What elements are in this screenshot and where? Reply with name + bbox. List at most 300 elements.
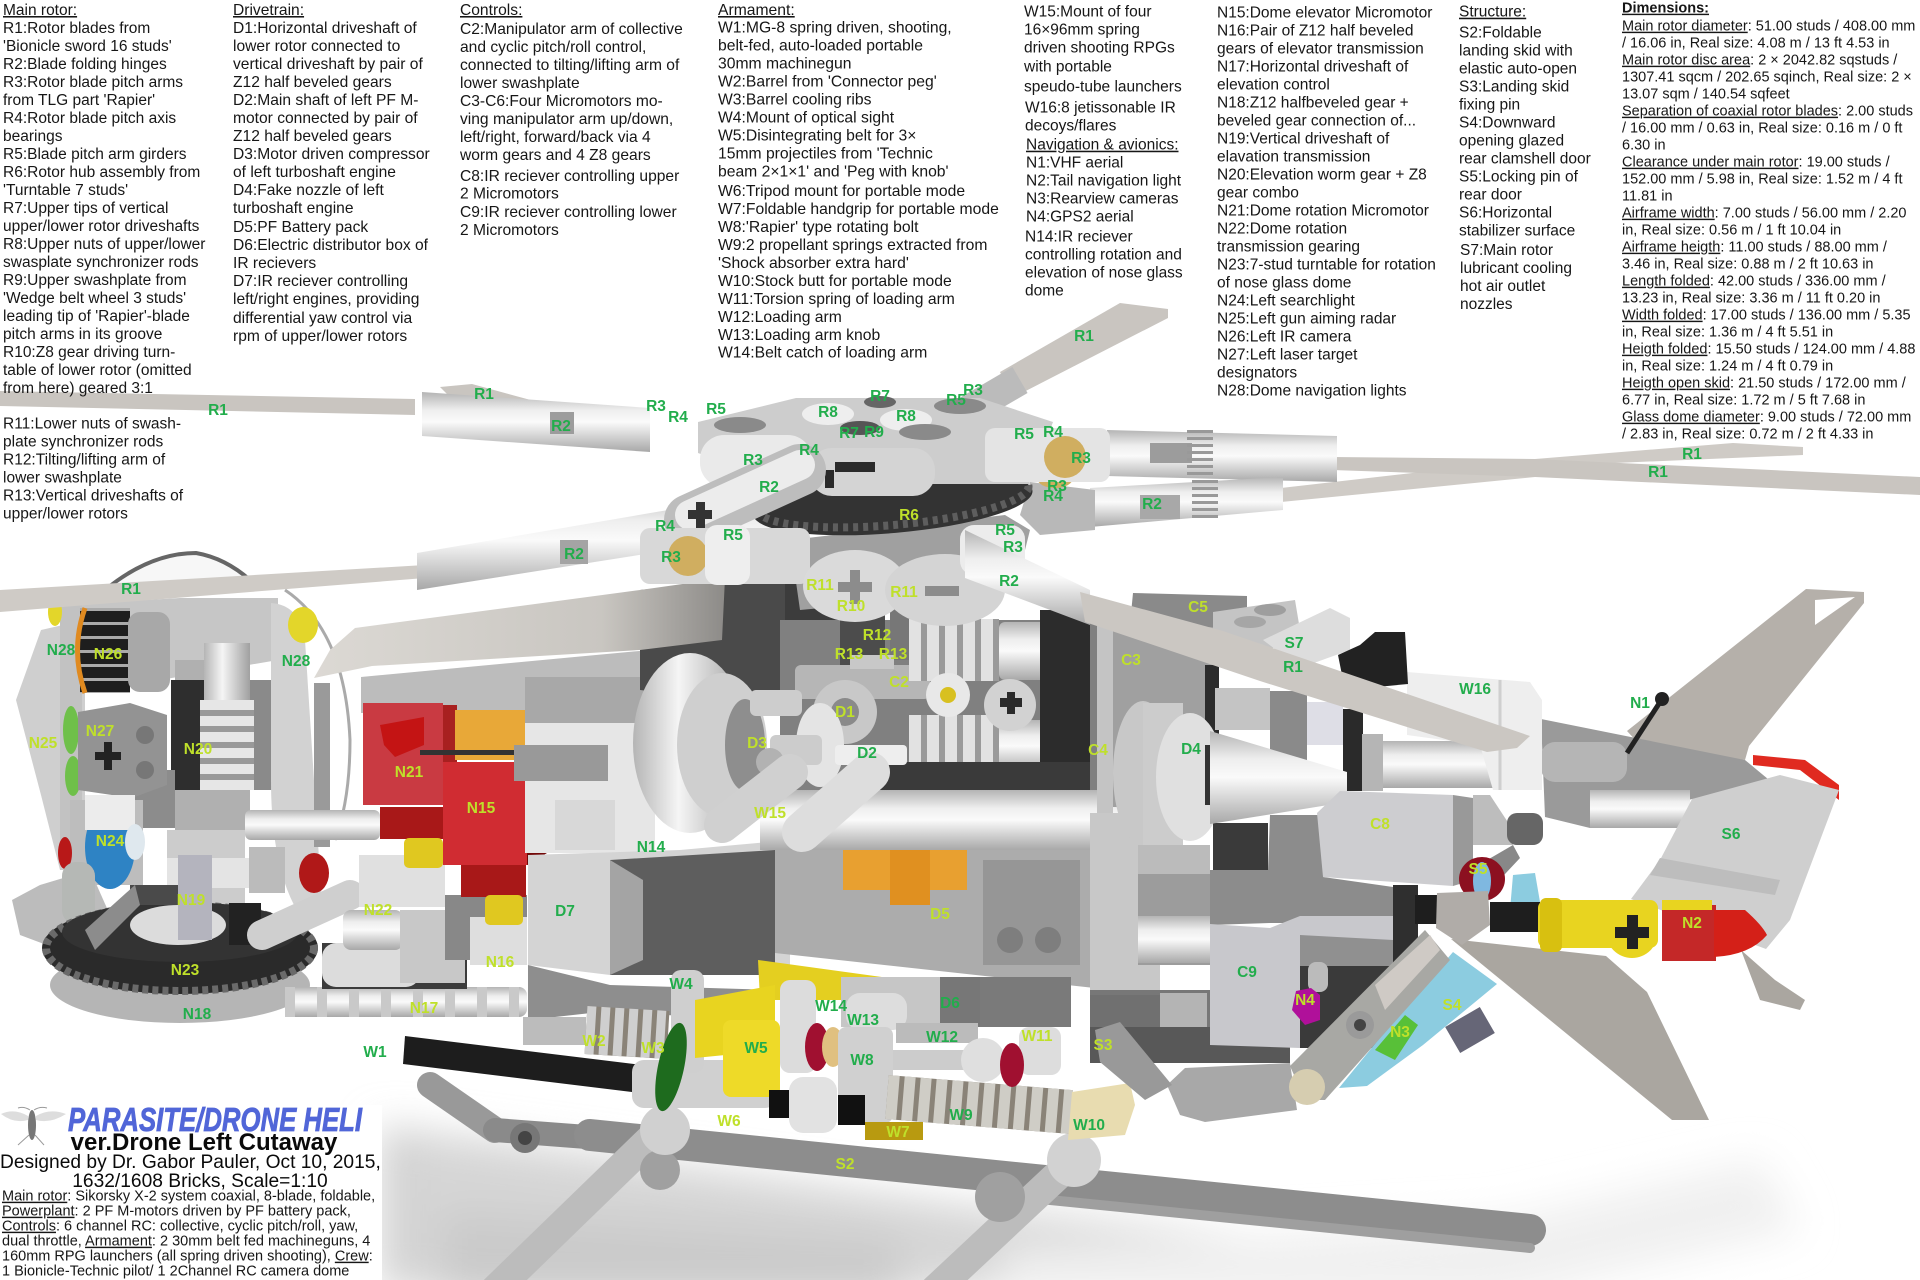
column text: dimensions: Heigth open skid xyxy=(1622,376,1730,392)
column text: drivetrain: D7:IR reciever controlling xyxy=(233,273,408,290)
column text: dimensions: / 16.06 in, Real size: 4.08 m / 13 ft 4.53 in xyxy=(1622,36,1890,52)
column text: drivetrain: IR recievers xyxy=(233,255,316,272)
column text: structure: lubricant cooling xyxy=(1460,260,1572,277)
part labels: rotor: R2 xyxy=(759,479,779,496)
column text: main rotor: R7:Upper tips of vertical xyxy=(3,200,168,217)
roof fairing xyxy=(314,573,845,700)
column text: controls: Controls: xyxy=(460,2,522,19)
part labels: navigation: N19 xyxy=(177,892,206,909)
part labels: armament: W3 xyxy=(641,1040,665,1057)
column text: navigation continued: beveled gear connection of... xyxy=(1217,112,1416,130)
part labels: navigation: N23 xyxy=(171,962,200,979)
column text: main rotor continued: upper/lower rotors xyxy=(3,506,128,522)
column text: armament continued and navigation: elevation of nose glass xyxy=(1025,265,1183,282)
rotor blade over nose xyxy=(0,490,785,612)
column text: controls: C8:IR reciever controlling upper xyxy=(460,168,679,185)
text: credits: 1632/1608 Bricks, Scale=1:10 xyxy=(72,1171,328,1192)
column text: dimensions: : 7.00 studs / 56.00 mm / 2.20 xyxy=(1715,206,1906,222)
part labels: navigation: N20 xyxy=(184,741,212,758)
part labels: rotor: R1 xyxy=(474,386,494,403)
column text: drivetrain: motor connected by pair of xyxy=(233,110,418,127)
part labels: rotor: R5 xyxy=(1014,426,1034,443)
column text: main rotor: R2:Blade folding hinges xyxy=(3,56,167,73)
column text: navigation continued: N24:Left searchlight xyxy=(1217,292,1356,310)
column text: armament: belt-fed, auto-loaded portable xyxy=(718,38,923,54)
column text: drivetrain: differential yaw control via xyxy=(233,310,412,327)
column text: main rotor: pitch arms in its groove xyxy=(3,326,162,343)
part labels: rotor: R8 xyxy=(896,408,916,425)
part labels: armament xyxy=(363,681,1491,1141)
column text: armament continued and navigation: speudo-tube launchers xyxy=(1024,79,1182,96)
column text: main rotor continued: R11:Lower nuts of swash- xyxy=(3,416,181,432)
part labels: rotor: R5 xyxy=(723,527,743,544)
column text: structure: S2:Foldable xyxy=(1459,25,1542,42)
part labels: armament: W14 xyxy=(815,998,847,1015)
heading: project name: PARASITE/DRONE HELI xyxy=(68,1101,363,1138)
part labels: structure: S7 xyxy=(1285,635,1303,652)
column text: dimensions: : 19.00 studs / xyxy=(1799,155,1891,171)
part labels: rotor: R2 xyxy=(551,418,571,435)
column text: main rotor continued: lower swashplate xyxy=(3,470,122,486)
column text: main rotor: upper/lower rotor driveshafts xyxy=(3,218,200,235)
column text: main rotor: 'Wedge belt wheel 3 studs' xyxy=(3,290,186,307)
machine gun assembly xyxy=(403,960,1172,1140)
lower fuselage C9 block xyxy=(1090,813,1418,1122)
text: summary: Crew: xyxy=(335,1249,373,1265)
red micromotors N21 and N15 xyxy=(361,650,650,925)
column text: navigation continued: N18:Z12 halfbeveled gear + xyxy=(1217,94,1409,112)
icon: parasite wasp xyxy=(1,1107,66,1145)
part labels: armament: W7 xyxy=(886,1124,910,1141)
part labels: controls and drivetrain: C8 xyxy=(1370,816,1390,833)
part labels: navigation: N3 xyxy=(1390,1024,1410,1041)
part labels: navigation: N15 xyxy=(467,800,496,817)
part labels: rotor: R5 xyxy=(706,401,726,418)
column text: main rotor: R6:Rotor hub assembly from xyxy=(3,164,200,181)
part labels: rotor: R1 xyxy=(1283,659,1303,676)
part labels: rotor: R3 xyxy=(661,549,681,566)
part labels: rotor: R3 xyxy=(646,398,666,415)
central transmission and worm gears xyxy=(780,570,1100,810)
column text: dimensions: : 2.00 studs xyxy=(1838,104,1913,120)
column text: controls: and cyclic pitch/roll control, xyxy=(460,39,646,56)
column text: navigation continued: N25:Left gun aiming radar xyxy=(1217,310,1396,328)
column text: armament: W1:MG-8 spring driven, shooting, xyxy=(718,20,952,36)
part labels: rotor: R2 xyxy=(1142,496,1162,513)
column text: main rotor continued: plate synchronizer rods xyxy=(3,434,163,450)
part labels: controls and drivetrain: C2 xyxy=(889,674,909,691)
part labels: armament: W12 xyxy=(926,1029,958,1046)
column text: dimensions: Dimensions: xyxy=(1622,1,1709,17)
part labels: navigation: N18 xyxy=(183,1006,212,1023)
part labels: armament: W13 xyxy=(847,1012,879,1029)
column text: dimensions: : 9.00 studs / 72.00 mm xyxy=(1760,410,1911,426)
column text: main rotor continued: R12:Tilting/lifting arm of xyxy=(3,452,166,468)
column text: drivetrain: lower rotor connected to xyxy=(233,38,401,55)
column text: drivetrain: D4:Fake nozzle of left xyxy=(233,182,384,199)
column text: dimensions: 11.81 in xyxy=(1622,189,1673,205)
text: summary: : 6 channel RC: collective, cyclic pitch/roll, yaw, xyxy=(56,1219,358,1235)
part labels: rotor: R3 xyxy=(963,382,983,399)
column text: dimensions: : 42.00 studs / 336.00 mm / xyxy=(1710,274,1887,290)
part labels: controls and drivetrain: D3 xyxy=(747,735,767,752)
part labels: controls and drivetrain: C9 xyxy=(1237,964,1257,981)
part labels: navigation: N28 xyxy=(282,653,311,670)
column text: dimensions: : 2 × 2042.82 sqstuds / xyxy=(1750,53,1898,69)
part labels: armament: W2 xyxy=(582,1033,606,1050)
column text: main rotor: R10:Z8 gear driving turn- xyxy=(3,344,175,361)
part labels: structure: S6 xyxy=(1722,826,1741,843)
part labels: rotor: R4 xyxy=(1043,424,1063,441)
column text: drivetrain: D6:Electric distributor box of xyxy=(233,237,429,254)
column text: dimensions: : 17.00 studs / 136.00 mm / 5.35 xyxy=(1703,308,1911,324)
title panel xyxy=(0,1101,382,1280)
part labels: controls and drivetrain: D5 xyxy=(930,906,950,923)
column text: structure: landing skid with xyxy=(1459,43,1573,60)
part labels: rotor: R1 xyxy=(208,402,228,419)
text: summary: : Sikorsky X-2 system coaxial, 8-blade, foldable, xyxy=(67,1189,375,1205)
part labels: rotor: R7 xyxy=(839,425,859,442)
column text: armament: 'Shock absorber extra hard' xyxy=(718,255,909,272)
column text: drivetrain: of left turboshaft engine xyxy=(233,164,396,181)
rear top deck C5 and nozzles S7 xyxy=(1130,593,1350,668)
part labels: navigation: N16 xyxy=(486,954,515,971)
column text: controls: connected to tilting/lifting arm of xyxy=(460,57,680,74)
part labels: rotor: R4 xyxy=(799,442,819,459)
part labels: navigation: N4 xyxy=(1295,992,1315,1009)
part labels: structure: S4 xyxy=(1443,997,1462,1014)
column text: navigation continued: N16:Pair of Z12 half beveled xyxy=(1217,22,1413,40)
column text: dimensions: in, Real size: 0.56 m / 1 ft 10.04 in xyxy=(1622,223,1841,239)
text: summary: : 2 PF M-motors driven by PF battery pack, xyxy=(75,1204,351,1220)
part labels: controls and drivetrain: D6 xyxy=(940,995,960,1012)
part labels: rotor: R3 xyxy=(743,452,763,469)
nose assembly xyxy=(12,598,380,1023)
column text: drivetrain: left/right engines, providing xyxy=(233,291,419,308)
part labels: rotor: R7 xyxy=(870,388,890,405)
part labels: rotor: R4 xyxy=(1043,488,1063,505)
column text: armament: W2:Barrel from 'Connector peg' xyxy=(718,74,937,90)
column text: armament: W10:Stock butt for portable mode xyxy=(718,273,952,290)
column text: controls: lower swashplate xyxy=(460,75,580,92)
column text: navigation continued: N17:Horizontal driveshaft of xyxy=(1217,58,1409,76)
part labels: armament: W5 xyxy=(744,1040,768,1057)
column text: dimensions: / 16.00 mm / 0.63 in, Real size: 0.16 m / 0 ft xyxy=(1622,121,1902,137)
column text: dimensions: Glass dome diameter xyxy=(1622,410,1760,426)
column text: structure: stabilizer surface xyxy=(1459,223,1575,240)
column text: main rotor: Main rotor: xyxy=(3,2,77,19)
column text: armament: W12:Loading arm xyxy=(718,309,842,326)
part labels: navigation: N28 xyxy=(47,642,76,659)
column text: navigation continued: N27:Left laser target xyxy=(1217,346,1358,364)
column text: main rotor: R5:Blade pitch arm girders xyxy=(3,146,187,163)
column text: armament continued and navigation: driven shooting RPGs xyxy=(1024,40,1175,57)
column text: armament continued and navigation: W15:Mount of four xyxy=(1024,4,1152,21)
column text: dimensions: Clearance under main rotor xyxy=(1622,155,1799,171)
part labels: structure: S2 xyxy=(836,1156,854,1173)
text: credits: Designed by Dr. Gabor Pauler, Oct 10, 2015, xyxy=(0,1152,381,1173)
column text: dimensions: 13.23 in, Real size: 3.36 m / 11 ft 0.20 in xyxy=(1622,291,1880,307)
column text: armament continued and navigation: N1:VHF aerial xyxy=(1026,155,1123,172)
column text: main rotor continued: R13:Vertical driveshafts of xyxy=(3,488,184,504)
column text: main rotor: R4:Rotor blade pitch axis xyxy=(3,110,176,127)
column text: armament: W14:Belt catch of loading arm xyxy=(718,344,927,362)
column text: armament: 15mm projectiles from 'Technic xyxy=(718,146,933,162)
column text: armament continued and navigation: Navigation & avionics: xyxy=(1026,137,1178,154)
column text: main rotor: R1:Rotor blades from xyxy=(3,20,150,37)
column text: dimensions: 3.46 in, Real size: 0.88 m / 2 ft 10.63 in xyxy=(1622,257,1873,273)
column text: armament: W8:'Rapier' type rotating bolt xyxy=(718,219,919,236)
column text: armament continued and navigation: dome xyxy=(1025,283,1064,300)
column text: navigation continued: transmission gearing xyxy=(1217,238,1360,256)
column text: structure: fixing pin xyxy=(1459,97,1520,114)
column text: dimensions: 152.00 mm / 5.98 in, Real size: 1.52 m / 4 ft xyxy=(1622,172,1902,188)
column text: controls: ving manipulator arm up/down, xyxy=(460,111,673,128)
electronics block C8 xyxy=(1317,791,1543,890)
column text: drivetrain: turboshaft engine xyxy=(233,200,354,217)
column text: dimensions: Width folded xyxy=(1622,308,1703,324)
part labels: navigation: N2 xyxy=(1682,915,1702,932)
column text: drivetrain: Z12 half beveled gears xyxy=(233,74,392,91)
column text: structure: rear door xyxy=(1459,187,1522,204)
rotor blade tubes xyxy=(422,380,1337,527)
part labels: rotor: R3 xyxy=(1047,478,1067,495)
column text: structure: hot air outlet xyxy=(1460,278,1546,295)
column text: navigation continued: N22:Dome rotation xyxy=(1217,220,1347,238)
column text: armament continued and navigation: N3:Rearview cameras xyxy=(1026,191,1179,208)
column text: armament: W11:Torsion spring of loading arm xyxy=(718,291,955,308)
column text: armament continued and navigation: controlling rotation and xyxy=(1025,247,1182,264)
column text: dimensions: in, Real size: 1.24 m / 4 ft 0.79 in xyxy=(1622,359,1833,375)
column text: drivetrain: vertical driveshaft by pair of xyxy=(233,56,423,73)
column text: main rotor: 'Turntable 7 studs' xyxy=(3,182,128,199)
part labels: structure: S5 xyxy=(1469,861,1488,878)
column text: controls: C3-C6:Four Micromotors mo- xyxy=(460,93,663,110)
column text: dimensions: / 2.83 in, Real size: 0.72 m / 2 ft 4.33 in xyxy=(1622,427,1873,443)
column text: dimensions: Airframe width xyxy=(1622,206,1715,222)
column text: dimensions: : 21.50 studs / 172.00 mm / xyxy=(1730,376,1907,392)
column text: structure: S7:Main rotor xyxy=(1460,242,1553,259)
column text: dimensions: 1307.41 sqcm / 202.65 sqinch, Real size: 2 × xyxy=(1622,70,1912,86)
column text: dimensions: Length folded xyxy=(1622,274,1710,290)
part labels: armament: W6 xyxy=(717,1113,741,1130)
part labels: rotor: R13 xyxy=(835,646,864,663)
part labels: armament: W8 xyxy=(850,1052,874,1069)
part labels: controls and drivetrain: C3 xyxy=(1121,652,1141,669)
part labels: navigation: N26 xyxy=(94,646,123,663)
part labels: navigation: N25 xyxy=(29,735,58,752)
heading: version: ver.Drone Left Cutaway xyxy=(71,1129,338,1156)
column text: navigation continued: N19:Vertical driveshaft of xyxy=(1217,130,1390,148)
text: summary: dual throttle, xyxy=(2,1234,85,1250)
column text: armament: 30mm machinegun xyxy=(718,56,851,72)
part labels: rotor: R8 xyxy=(818,404,838,421)
column text: main rotor: R9:Upper swashplate from xyxy=(3,272,186,289)
part labels: rotor: R1 xyxy=(1682,446,1702,463)
part labels: controls and drivetrain: D7 xyxy=(555,903,575,920)
column text: navigation continued: N15:Dome elevator Micromotor xyxy=(1217,4,1432,22)
column text: armament: beam 2×1×1' and 'Peg with knob' xyxy=(718,164,949,180)
column text: structure: S6:Horizontal xyxy=(1459,205,1552,222)
column text: armament: W5:Disintegrating belt for 3× xyxy=(718,128,916,144)
rear door glass S4 and arm xyxy=(1289,857,1540,1105)
part labels: navigation: N22 xyxy=(364,902,392,919)
part labels: rotor: R3 xyxy=(1003,539,1023,556)
part labels: armament: W1 xyxy=(363,1044,387,1061)
column text: navigation continued: N23:7-stud turntable for rotation xyxy=(1217,256,1436,274)
rear bulkhead C3 and under-blade structure xyxy=(1097,625,1493,815)
column text: navigation continued: N21:Dome rotation Micromotor xyxy=(1217,202,1429,220)
column text: dimensions: Main rotor diameter xyxy=(1622,19,1748,35)
left turbine engine compressor xyxy=(633,653,907,833)
part labels: structure: S3 xyxy=(1094,1037,1113,1054)
column text: dimensions: Airframe heigth xyxy=(1622,240,1720,256)
column text: dimensions: Heigth folded xyxy=(1622,342,1707,358)
column text: navigation continued: N26:Left IR camera xyxy=(1217,328,1352,346)
column text: structure: nozzles xyxy=(1460,296,1513,313)
column text: drivetrain: D3:Motor driven compressor xyxy=(233,146,430,163)
part labels: navigation xyxy=(29,642,1702,1041)
part labels: armament: W10 xyxy=(1073,1117,1105,1134)
column text: drivetrain: Drivetrain: xyxy=(233,2,304,19)
part labels: controls and drivetrain: C5 xyxy=(1188,599,1208,616)
part labels: rotor: R1 xyxy=(1074,328,1094,345)
part labels: controls and drivetrain: C4 xyxy=(1088,742,1108,759)
part labels: rotor: R6 xyxy=(899,507,919,524)
column text: dimensions: 6.77 in, Real size: 1.72 m / 5 ft 7.68 in xyxy=(1622,393,1865,409)
part labels: rotor: R12 xyxy=(863,627,891,644)
part labels: rotor: R5 xyxy=(995,522,1015,539)
part labels: rotor: R11 xyxy=(806,577,834,594)
column text: main rotor: R8:Upper nuts of upper/lower xyxy=(3,236,205,253)
part labels: navigation: N21 xyxy=(395,764,424,781)
column text: dimensions: : 11.00 studs / 88.00 mm / xyxy=(1720,240,1888,256)
tail light arm N2 xyxy=(1415,891,1767,961)
column text: drivetrain: D5:PF Battery pack xyxy=(233,219,368,236)
part labels: rotor xyxy=(121,328,1702,676)
column text: armament continued and navigation: N14:IR reciever xyxy=(1025,229,1133,246)
column text: armament continued and navigation: decoys/flares xyxy=(1025,118,1117,135)
part labels: rotor: R4 xyxy=(668,409,688,426)
column text: structure: rear clamshell door xyxy=(1459,151,1591,168)
skid joints xyxy=(510,1105,1101,1222)
part labels: rotor: R10 xyxy=(837,598,865,615)
part labels: armament: W15 xyxy=(754,805,786,822)
text: summary: Main rotor xyxy=(2,1189,67,1205)
part labels: rotor: R11 xyxy=(890,584,918,601)
skid landing gear S2 xyxy=(430,1085,1530,1280)
column text: navigation continued: gears of elevator transmission xyxy=(1217,40,1424,58)
main rotor hub xyxy=(640,396,1110,626)
rotor blades behind body xyxy=(0,303,1920,502)
column text: dimensions: 6.30 in xyxy=(1622,138,1666,154)
part labels: navigation: N27 xyxy=(86,723,114,740)
part labels: controls and drivetrain xyxy=(555,599,1390,1012)
part labels: structure xyxy=(836,635,1741,1173)
column text: structure: S5:Locking pin of xyxy=(1459,169,1579,186)
column text: navigation continued: of nose glass dome xyxy=(1217,274,1351,292)
column text: drivetrain: Z12 half beveled gears xyxy=(233,128,392,145)
front bulkhead and D7 block xyxy=(514,677,790,1020)
column text: armament: W6:Tripod mount for portable mode xyxy=(718,183,965,200)
column text: armament: W7:Foldable handgrip for portable mode xyxy=(718,201,999,218)
column text: navigation continued: elevation control xyxy=(1217,76,1330,94)
column text: navigation continued: elavation transmission xyxy=(1217,148,1370,166)
part labels: navigation: N24 xyxy=(96,833,125,850)
part labels: rotor: R5 xyxy=(946,392,966,409)
column text: armament continued and navigation: N4:GPS2 aerial xyxy=(1026,209,1134,226)
column text: dimensions: in, Real size: 1.36 m / 4 ft 5.51 in xyxy=(1622,325,1833,341)
column text: controls: 2 Micromotors xyxy=(460,222,559,239)
column text: dimensions: Main rotor disc area xyxy=(1622,53,1751,69)
central fuselage and battery box D5 xyxy=(760,790,1160,1027)
text: summary: 1 Bionicle-Technic pilot/ 1 2Channel RC camera dome xyxy=(2,1264,349,1280)
column text: main rotor: table of lower rotor (omitted xyxy=(3,362,192,379)
column text: controls: left/right, forward/back via 4 xyxy=(460,129,651,146)
column text: armament continued and navigation: N2:Tail navigation light xyxy=(1026,173,1182,190)
text: summary: 160mm RPG launchers (all spring driven shooting), xyxy=(2,1249,335,1265)
part labels: controls and drivetrain: D1 xyxy=(835,704,855,721)
column text: structure: elastic auto-open xyxy=(1459,61,1577,78)
tail boom, fins and stabilizer xyxy=(1451,589,1864,1120)
column text: main rotor: from here) geared 3:1 xyxy=(3,380,153,397)
part labels: armament: W9 xyxy=(949,1107,973,1124)
part labels: rotor: R2 xyxy=(564,546,584,563)
column text: armament continued and navigation: W16:8 jetissonable IR xyxy=(1025,100,1176,117)
text: summary: Powerplant xyxy=(2,1204,75,1220)
column text: navigation continued: gear combo xyxy=(1217,184,1299,202)
column text: armament continued and navigation: with portable xyxy=(1023,59,1112,76)
column text: drivetrain: D2:Main shaft of left PF M- xyxy=(233,92,418,109)
column text: armament: W4:Mount of optical sight xyxy=(718,110,895,126)
column text: navigation continued: designators xyxy=(1217,364,1297,382)
column text: structure: S4:Downward xyxy=(1459,115,1556,132)
part labels: rotor: R1 xyxy=(1648,464,1668,481)
column text: dimensions: : 51.00 studs / 408.00 mm xyxy=(1748,19,1915,35)
part labels: armament: W4 xyxy=(669,976,693,993)
column text: dimensions: 13.07 sqm / 140.54 sqfeet xyxy=(1622,87,1790,103)
text: summary: Armament: 2 30mm belt fed machineguns, 4 xyxy=(85,1234,370,1250)
column text: controls: C9:IR reciever controlling lower xyxy=(460,204,677,221)
column text: armament: W13:Loading arm knob xyxy=(718,327,880,344)
column text: navigation continued: N28:Dome navigation lights xyxy=(1217,382,1407,400)
column text: dimensions: Separation of coaxial rotor blades xyxy=(1622,104,1838,120)
column text: drivetrain: D1:Horizontal driveshaft of xyxy=(233,20,417,37)
part labels: rotor: R9 xyxy=(864,424,884,441)
rear engine nozzle D4 xyxy=(1113,701,1347,845)
part labels: rotor: R3 xyxy=(1071,450,1091,467)
column text: controls: 2 Micromotors xyxy=(460,186,559,202)
floor shadow xyxy=(380,1125,1800,1280)
column text: armament: W9:2 propellant springs extracted from xyxy=(718,237,987,254)
lower nose transmission xyxy=(285,855,527,1017)
column text: armament continued and navigation: 16×96mm spring xyxy=(1024,22,1140,39)
column text: main rotor: leading tip of 'Rapier'-blade xyxy=(3,308,190,325)
column text: controls: C2:Manipulator arm of collective xyxy=(460,21,683,38)
column text: drivetrain: rpm of upper/lower rotors xyxy=(233,328,407,345)
part labels: armament: W16 xyxy=(1459,681,1491,698)
text: summary: Controls xyxy=(2,1219,56,1235)
part labels: navigation: N14 xyxy=(637,839,666,856)
nose dome glass outline xyxy=(105,553,350,840)
part labels: rotor: R2 xyxy=(999,573,1019,590)
column text: main rotor: R3:Rotor blade pitch arms xyxy=(3,74,183,91)
column text: structure: S3:Landing skid xyxy=(1459,79,1569,96)
part labels: navigation: N17 xyxy=(410,1000,438,1017)
column text: main rotor: bearings xyxy=(3,128,63,145)
column text: structure: opening glazed xyxy=(1459,133,1564,150)
column text: main rotor: from TLG part 'Rapier' xyxy=(3,92,155,109)
